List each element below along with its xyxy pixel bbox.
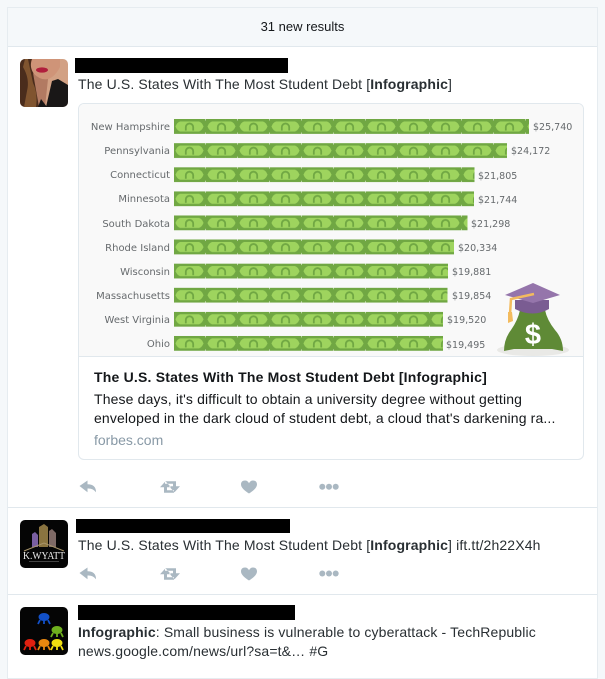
row: New Hampshire: New Hampshire [91,122,170,133]
card source: forbes.com [94,432,163,448]
link card [78,103,584,460]
row: Minnesota: $21,744 [478,195,517,206]
row: Connecticut [110,167,517,182]
card title: The U.S. States With The Most Student Debt [Infographic] [94,369,487,385]
card chart image [79,104,583,357]
row: Rhode Island: $20,334 [458,243,497,254]
row: Rhode Island: Rhode Island [105,243,170,254]
row: South Dakota [102,215,510,230]
icon: more [319,484,325,490]
row: Massachusetts [96,288,491,303]
card description: enveloped in the dark cloud of student debt, a cloud that's darkening ra... [94,410,555,426]
row: New Hampshire [91,119,572,134]
icon: like [241,480,257,494]
redacted name bar [75,58,288,73]
row: Pennsylvania: Pennsylvania [104,146,170,157]
icon: retweet [160,481,180,493]
row: Ohio [147,336,485,351]
tweet text 1: The U.S. States With The Most Student Debt [Infographic] [78,76,452,92]
row: West Virginia: $19,520 [447,315,486,326]
action icons: tweet 1 [80,480,339,494]
tweet text 3 [78,624,536,659]
card description: These days, it's difficult to obtain a university degree without getting [94,391,522,407]
redacted name bar [78,605,295,620]
row: Pennsylvania [104,143,550,158]
row: Pennsylvania: $24,172 [511,146,550,157]
new results bar [8,8,597,47]
row: Rhode Island [105,240,497,254]
icon: retweet [160,568,180,580]
row: Wisconsin: Wisconsin [120,267,170,278]
row: Minnesota: Minnesota [118,194,170,205]
card description [94,391,555,426]
icon: more [319,570,325,576]
row: Ohio: Ohio [147,339,170,350]
row: Massachusetts: Massachusetts [96,291,170,302]
tweet text 2: The U.S. States With The Most Student Debt [Infographic] ift.tt/2h22X4h [78,537,541,553]
row: Ohio: $19,495 [446,340,485,351]
row: West Virginia [105,312,486,327]
icon: money bag with graduation cap [497,283,569,356]
row: Connecticut: Connecticut [110,170,170,181]
row: West Virginia: West Virginia [105,315,170,326]
row: Wisconsin [120,264,491,279]
row: Minnesota [118,191,517,206]
avatar: space invaders [20,607,68,655]
row: New Hampshire: $25,740 [533,122,572,133]
divider [8,507,597,508]
new results bar: 31 new results [261,19,344,34]
avatar: woman [20,59,68,107]
icon: like [241,568,257,580]
row: South Dakota: $21,298 [471,219,510,230]
divider [8,594,597,595]
row: Connecticut: $21,805 [478,171,517,182]
tweet text 3: news.google.com/news/url?sa=t&… #G [78,642,328,658]
row: South Dakota: South Dakota [102,219,170,230]
avatar: K. Wyatt [20,520,68,568]
avatar: K. Wyatt: K.WYATT [23,551,66,562]
icon: money bag with graduation cap: $ [525,319,541,351]
redacted name bar [76,519,290,533]
icon: reply [80,480,96,492]
row: Massachusetts: $19,854 [452,291,491,302]
action icons: tweet 2 [80,568,339,580]
bar chart: student debt by state [91,119,572,356]
tweet text 3: Infographic: Small business is vulnerable to cyberattack - TechRepublic [78,624,536,640]
icon: reply [80,568,96,579]
row: Wisconsin: $19,881 [452,267,491,278]
